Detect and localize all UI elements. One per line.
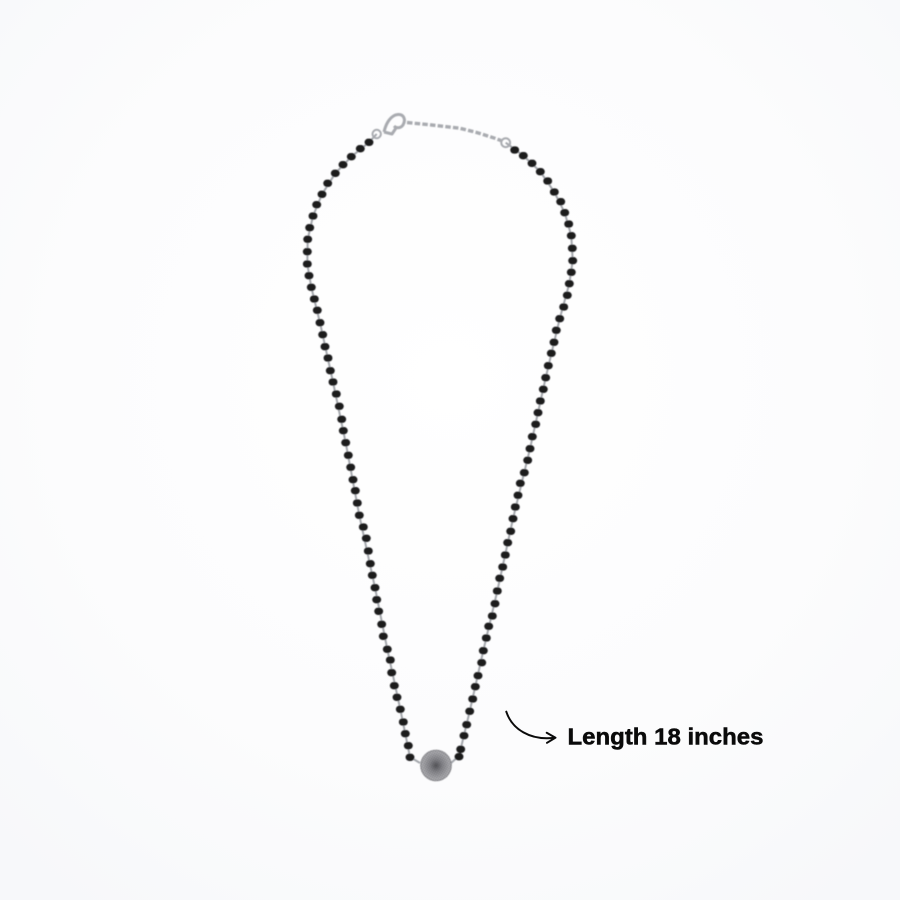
length callout [506, 712, 764, 749]
curved arrow [506, 712, 556, 743]
end ring [501, 138, 510, 147]
pendant ball [420, 750, 452, 781]
extender links [407, 122, 501, 140]
length label: Length 18 inches [568, 723, 764, 749]
left bead strand [306, 142, 411, 757]
lobster clasp [384, 114, 404, 134]
clasp and extender chain [372, 114, 510, 147]
right bead strand [458, 150, 574, 757]
jump ring [372, 130, 381, 138]
necklace [306, 114, 574, 781]
silver chain [307, 134, 573, 763]
